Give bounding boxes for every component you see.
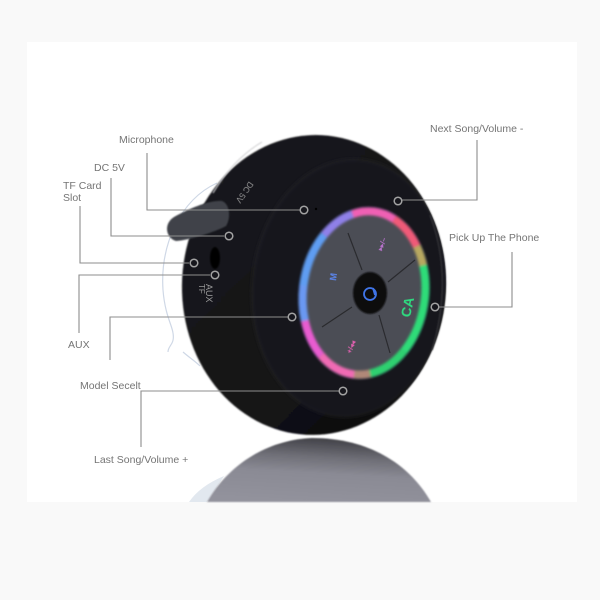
label: aux: AUX <box>68 339 90 351</box>
button face <box>293 204 435 382</box>
power icon <box>364 288 376 300</box>
speaker <box>167 128 456 442</box>
label: next song: Next Song/Volume - <box>430 123 524 135</box>
label: dc 5v: DC 5V <box>94 162 125 174</box>
white panel <box>27 42 577 502</box>
side labels: DC 5V <box>233 180 255 205</box>
reflection of speaker <box>189 438 431 502</box>
speaker: CA <box>397 296 417 319</box>
label: pick up: Pick Up The Phone <box>449 232 539 244</box>
power button <box>353 272 387 314</box>
label: tf card slot: TF Card <box>63 180 102 192</box>
label: microphone: Microphone <box>119 134 174 146</box>
front face contour <box>252 160 446 418</box>
leader lines <box>79 140 512 447</box>
label: tf card slot: Slot <box>63 192 81 204</box>
speaker body <box>174 128 454 442</box>
LED ring <box>293 204 435 382</box>
side port recess <box>210 247 220 269</box>
label: last song: Last Song/Volume + <box>94 454 188 466</box>
speaker: TF <box>197 284 206 294</box>
water splash outline <box>163 183 217 366</box>
ring halo <box>288 199 440 387</box>
microphone hole <box>315 208 317 210</box>
rubber port flap <box>167 201 229 241</box>
speaker: AUX <box>204 284 214 303</box>
speaker: +/◂◂ <box>346 340 358 355</box>
right edge highlight <box>430 215 442 350</box>
button labels: M <box>328 272 339 281</box>
label: model select: Model Secelt <box>80 380 141 392</box>
button dividers <box>322 233 415 353</box>
leader markers <box>190 197 439 395</box>
top edge highlight <box>213 142 262 193</box>
labels <box>63 123 539 466</box>
speaker: ▸▸/− <box>377 237 389 253</box>
